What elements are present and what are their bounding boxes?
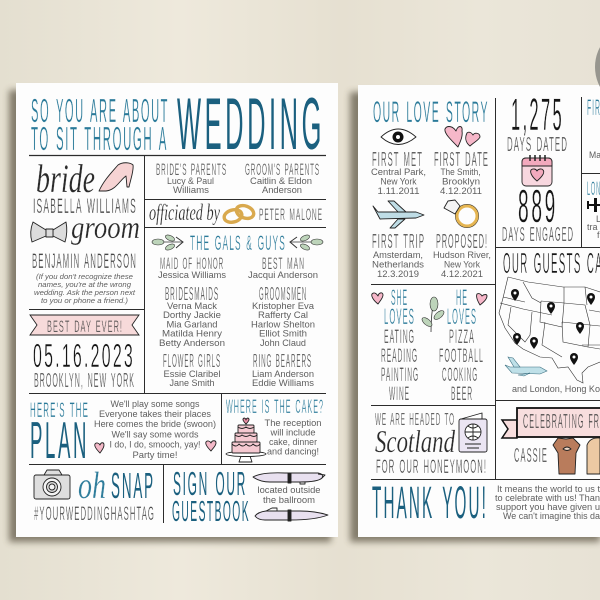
left program sheet <box>16 83 338 537</box>
icon: calendar heart <box>522 155 552 186</box>
icon: tan paw <box>587 438 600 474</box>
icon: heart right <box>206 441 216 451</box>
panel: our love story: Brooklyn <box>442 176 480 186</box>
panel: the gals and guys: Jane Smith <box>170 378 214 388</box>
panel: oh snap <box>34 465 155 525</box>
panel: our love story: 4.12.2011 <box>440 186 482 196</box>
panel: oh snap: oh <box>78 465 106 507</box>
panel: where is the cake: The reception <box>264 418 322 428</box>
panel: the plan: We'll play some songs <box>110 399 200 409</box>
panel: our love story: The Smith, <box>440 167 480 177</box>
panel: the gals and guys: Dorthy Jackie <box>163 310 221 320</box>
panel: she loves he loves <box>372 285 487 405</box>
panel: officiant <box>149 200 323 225</box>
icons: map pins <box>511 289 595 365</box>
panel: first (cropped) <box>587 95 600 160</box>
left program sheet: ISABELLA WILLIAMS <box>33 195 137 218</box>
right program sheet: FIRST DATE <box>434 149 489 171</box>
panel: the gals and guys: Betty Anderson <box>159 338 225 348</box>
panel: she loves he loves: WINE <box>389 384 410 405</box>
note: wedding. Ask the person next <box>34 288 136 297</box>
panel: parents: Anderson <box>262 185 302 195</box>
icon: two hearts <box>445 126 480 147</box>
panel: she loves he loves: PIZZA <box>449 327 475 348</box>
panel: she loves he loves: PAINTING <box>381 365 419 386</box>
right program sheet: PROPOSED! <box>436 231 488 253</box>
panel: the gals and guys: Jessica Williams <box>158 270 227 280</box>
left program sheet: #YOURWEDDINGHASHTAG <box>34 504 155 525</box>
wedding program infographic: WEDDING <box>177 84 325 165</box>
icon: pink shoe <box>99 163 133 191</box>
panel: guest map: and London, Hong Ko <box>512 384 600 394</box>
panel: parents: Williams <box>173 185 210 195</box>
panel: our love story: 1.11.2011 <box>378 186 420 196</box>
panel: the gals and guys: THE GALS & GUYS <box>190 231 286 255</box>
panel: our love story: Central Park, <box>371 167 426 177</box>
panel: our love story <box>371 96 491 279</box>
note: (If you don't recognize these <box>36 272 133 281</box>
panel: guest map <box>499 248 600 394</box>
panel: where is the cake: will include <box>269 428 316 438</box>
panel: honeymoon: Scotland <box>375 423 456 459</box>
panel: guestbook: the ballroom <box>263 495 315 505</box>
panel: the plan: HERE'S THE <box>30 398 89 422</box>
gray circle badge <box>595 25 600 109</box>
ribbon tail <box>502 420 517 438</box>
section rules <box>371 97 600 480</box>
panel: our love story: 12.3.2019 <box>377 269 419 279</box>
panel: guestbook: GUESTBOOK <box>172 496 250 528</box>
icon: passport <box>459 413 487 452</box>
icon: camera <box>34 470 70 499</box>
right program sheet: COOKING <box>442 365 478 386</box>
note: to you or phone a friend.) <box>41 296 128 305</box>
panel: the plan: Party time! <box>132 450 178 460</box>
icon: heart left <box>372 293 383 304</box>
panel: honeymoon: WE ARE HEADED TO <box>375 409 455 429</box>
panel: the gals and guys <box>152 231 323 388</box>
panel: the gals and guys: FLOWER GIRLS <box>163 350 221 371</box>
panel: the gals and guys: Jacqui Anderson <box>248 270 318 280</box>
panel: the plan: We'll say some words <box>112 430 199 440</box>
panel: the gals and guys: Harlow Shelton <box>251 320 315 330</box>
panel: where is the cake: and dancing! <box>267 446 319 456</box>
panel: long distance (cropped): f <box>597 230 600 240</box>
panel: where is the cake: cake, dinner <box>269 437 317 447</box>
panel: celebrating friends <box>502 408 600 474</box>
panel: the gals and guys: Mia Garland <box>166 320 218 330</box>
wedding program infographic: WHERE IS THE CAKE? <box>226 397 324 418</box>
panel: the plan: I do, I do, smooch, yay! <box>110 440 200 450</box>
thank you message: support you have given u <box>496 502 600 512</box>
icon: blue airplane <box>505 357 547 376</box>
panel: our love story: New York <box>444 260 480 270</box>
panel: the gals and guys: Liam Anderson <box>252 369 314 379</box>
panel: guestbook: located outside <box>258 485 320 495</box>
thank you message: We can't imagine this da <box>503 511 600 521</box>
thank you message: It means the world to us t <box>497 484 600 494</box>
title: SO YOU ARE ABOUT <box>31 92 169 129</box>
right program sheet: LOVES <box>447 304 477 329</box>
panel: days counters <box>502 89 574 246</box>
panel: long distance (cropped): tra <box>587 222 598 232</box>
panel: the gals and guys: BRIDESMAIDS <box>165 283 219 304</box>
panel: parents: Caitlin & Eldon <box>250 176 312 186</box>
panel: parents <box>156 160 320 195</box>
icon: gold rings <box>223 203 256 224</box>
panel: parents: BRIDE'S PARENTS <box>156 160 227 179</box>
icon: diamond ring <box>444 200 478 228</box>
ribbon: best day ever: BEST DAY EVER! <box>47 317 123 336</box>
icon: heart left <box>95 443 104 453</box>
date and place <box>33 337 135 392</box>
panel: our love story: Amsterdam, <box>373 250 423 260</box>
ribbon: best day ever <box>30 315 139 336</box>
left program sheet: 05.16.2023 <box>33 337 135 374</box>
left program sheet: BROOKLYN, NEW YORK <box>34 370 135 392</box>
icon: black plane <box>587 198 600 212</box>
panel: the gals and guys: Matilda Henry <box>162 328 223 338</box>
panel: the gals and guys: Kristopher Eva <box>252 301 314 311</box>
panel: the plan: Here comes the bride (swoon) <box>94 419 216 429</box>
thank you message <box>495 484 600 521</box>
panel: our love story: FIRST MET <box>372 149 423 171</box>
panel: guestbook: SIGN OUR <box>173 465 247 502</box>
panel: the gals and guys: Elliot Smith <box>259 328 307 338</box>
panel: officiant: officiated by <box>149 200 220 225</box>
panel: bride and groom: groom <box>71 209 140 245</box>
panel: the gals and guys: Verna Mack <box>167 301 218 311</box>
panel: where is the cake <box>226 397 324 462</box>
icon: bottom pen <box>255 508 328 521</box>
panel: honeymoon <box>375 409 487 478</box>
panel: she loves he loves: BEER <box>451 384 473 405</box>
panel: the gals and guys: Rafferty Cal <box>258 310 308 320</box>
title: TO SIT THROUGH A <box>31 120 168 157</box>
paper shadows <box>9 90 600 542</box>
icon: airplane <box>373 201 424 228</box>
left program sheet: BENJAMIN ANDERSON <box>32 250 137 273</box>
right program sheet <box>358 85 600 537</box>
panel: she loves he loves: SHE <box>391 285 408 310</box>
left program sheet: SNAP <box>111 465 155 506</box>
thank you message: to celebrate with us! Than <box>495 493 600 503</box>
wedding program infographic: PETER MALONE <box>259 205 323 224</box>
title <box>31 84 325 165</box>
panel: bride and groom <box>31 156 140 305</box>
panel: she loves he loves: LOVES <box>384 304 415 329</box>
icon: left leaves <box>152 234 183 251</box>
panel: bride and groom: bride <box>36 156 95 201</box>
panel: she loves he loves: HE <box>456 285 468 310</box>
icon: brown paw <box>553 438 580 474</box>
ribbon: celebrating banner <box>517 408 600 437</box>
wedding program infographic: RING BEARERS <box>253 350 312 371</box>
panel: our love story: New York <box>380 176 417 186</box>
icon: heart right <box>477 294 487 305</box>
icon: bow tie <box>31 222 67 242</box>
icon: eye <box>381 129 416 144</box>
right program sheet: FOOTBALL <box>439 346 484 367</box>
panel: she loves he loves: EATING <box>384 327 415 348</box>
panel: the plan: PLAN <box>30 412 89 470</box>
panel: our love story: 4.12.2021 <box>441 269 483 279</box>
wedding program infographic: GROOM'S PARENTS <box>245 160 320 179</box>
icon: top pen <box>253 473 325 484</box>
panel: she loves he loves: READING <box>381 346 418 367</box>
icon: right leaves <box>290 234 323 251</box>
panel: the gals and guys: BEST MAN <box>262 254 305 273</box>
icon: leafy sprig <box>420 297 446 332</box>
note <box>34 272 136 305</box>
panel: our love story: FIRST TRIP <box>372 231 425 253</box>
chart: US map <box>499 277 600 383</box>
panel: our love story: Hudson River, <box>433 250 491 260</box>
section rules <box>29 155 326 523</box>
panel: parents: Lucy & Paul <box>167 176 214 186</box>
note: names, you're at the wrong <box>38 280 132 289</box>
panel: our love story: Netherlands <box>372 260 425 270</box>
left program sheet: GROOMSMEN <box>259 283 307 304</box>
panel: the gals and guys: Eddie Williams <box>252 378 315 388</box>
panel: guestbook <box>172 465 328 528</box>
icon: tiered cake <box>226 418 266 462</box>
panel: the gals and guys: John Claud <box>260 338 306 348</box>
panel: the gals and guys: Essie Claribel <box>164 369 220 379</box>
panel: the plan: Everyone takes their places <box>99 409 212 419</box>
panel: long distance (cropped) <box>587 179 600 240</box>
panel: the gals and guys: MAID OF HONOR <box>160 254 224 273</box>
